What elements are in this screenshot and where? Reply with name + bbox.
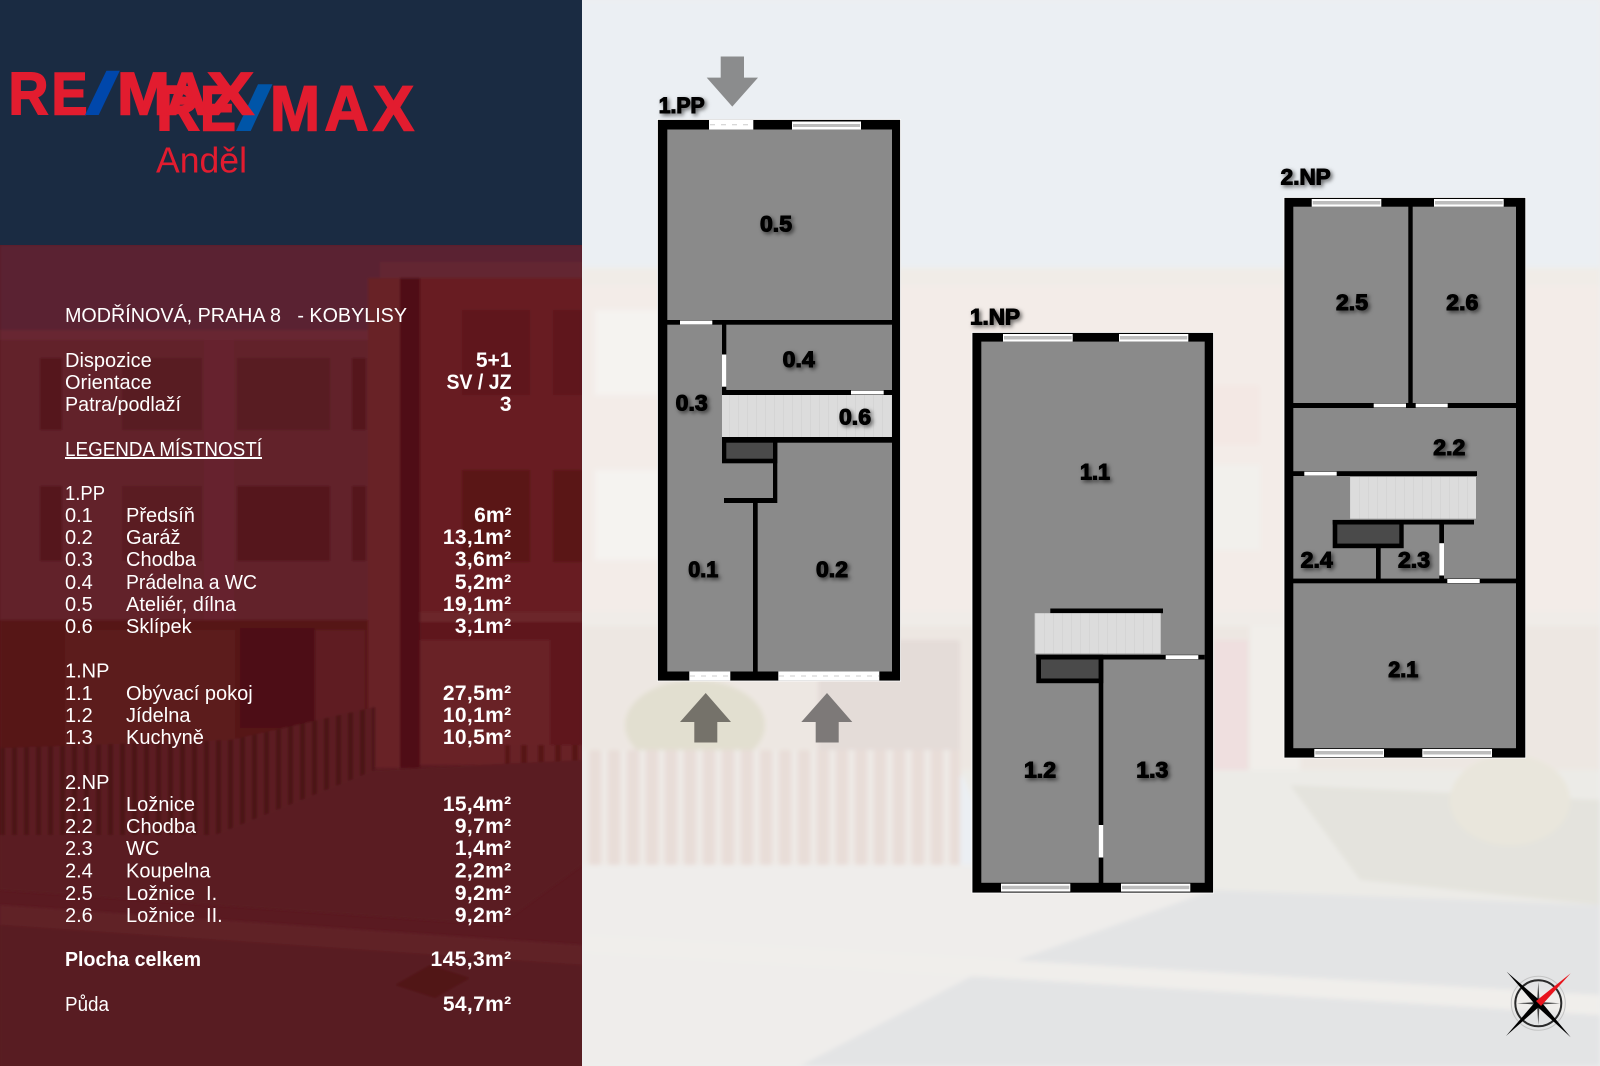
icon: compass bbox=[1506, 972, 1571, 1037]
legend: 2.NP rooms: 2.6 bbox=[65, 905, 93, 927]
logo: RE/MAX overlapping: E bbox=[52, 60, 88, 128]
room labels: 2.NP: 2.4 bbox=[1301, 548, 1333, 572]
legend: 1.PP rooms: 0.1 bbox=[65, 505, 93, 527]
logo: RE/MAX Anděl bbox=[156, 72, 414, 180]
logo: RE/MAX Anděl: A bbox=[324, 72, 368, 144]
logo: RE/MAX overlapping: R bbox=[8, 60, 48, 128]
legend: 1.NP rooms: 1.1 bbox=[65, 683, 93, 705]
heading: room legend: LEGENDA MÍSTNOSTÍ bbox=[65, 438, 262, 461]
arrow: bottom entrance left bbox=[680, 693, 731, 742]
legend: 2.NP rooms: 9,2m² bbox=[455, 904, 512, 927]
legend: 1.PP rooms: 19,1m² bbox=[443, 593, 512, 616]
room labels: 2.NP: 2.3 bbox=[1398, 548, 1430, 572]
legend: 1.PP rooms bbox=[65, 483, 512, 638]
arrow: bottom entrance right bbox=[801, 693, 852, 742]
logo: RE/MAX overlapping: X bbox=[207, 60, 254, 128]
legend: 1.PP rooms: Ateliér, dílna bbox=[126, 594, 237, 616]
legend: 2.NP rooms: 2.3 bbox=[65, 838, 93, 860]
legend: 2.NP rooms: 2.4 bbox=[65, 860, 93, 882]
plan title: 1.PP: 1.PP bbox=[659, 93, 705, 118]
left panel bbox=[0, 0, 582, 1066]
legend: 2.NP rooms: 2.2 bbox=[65, 816, 93, 838]
legend: 2.NP rooms: 1,4m² bbox=[455, 837, 512, 860]
legend: 2.NP rooms: 9,7m² bbox=[455, 815, 512, 838]
legend: 2.NP rooms: 2.5 bbox=[65, 883, 93, 905]
legend: 1.NP rooms: 10,1m² bbox=[443, 704, 512, 727]
legend: 1.NP rooms: 10,5m² bbox=[443, 726, 512, 749]
legend: 1.PP rooms: Prádelna a WC bbox=[126, 572, 257, 594]
legend: 1.PP rooms: 0.6 bbox=[65, 616, 93, 638]
legend: 1.PP rooms: 6m² bbox=[474, 504, 512, 527]
room labels: 1.PP bbox=[676, 212, 871, 582]
legend: 1.PP rooms: 0.2 bbox=[65, 527, 93, 549]
room labels: 1.PP: 0.6 bbox=[839, 404, 871, 430]
room labels: 1.NP: 1.3 bbox=[1136, 758, 1168, 782]
room labels: 2.NP bbox=[1301, 290, 1478, 682]
room labels: 1.PP: 0.2 bbox=[816, 557, 848, 582]
legend: 1.PP rooms: Sklípek bbox=[126, 616, 193, 638]
legend: 1.NP rooms bbox=[65, 660, 512, 749]
text block: property summary bbox=[65, 349, 512, 416]
panel: navy header bbox=[0, 0, 582, 245]
attic area: Půda bbox=[65, 994, 110, 1016]
legend: 1.PP rooms: Chodba bbox=[126, 549, 197, 571]
legend: 1.NP rooms: 1.3 bbox=[65, 727, 93, 749]
total area bbox=[65, 948, 512, 971]
legend: 2.NP rooms: WC bbox=[126, 838, 159, 860]
attic area bbox=[65, 993, 512, 1016]
legend: 1.PP rooms: 3,1m² bbox=[455, 615, 512, 638]
legend: 1.PP rooms: 0.5 bbox=[65, 594, 93, 616]
plan title: 1.NP: 1.NP bbox=[970, 304, 1020, 330]
room labels: 1.NP: 1.1 bbox=[1080, 460, 1110, 484]
floor plan: 2.NP bbox=[1281, 164, 1526, 758]
legend: 2.NP rooms: Chodba bbox=[126, 816, 197, 838]
legend: 2.NP rooms: Ložnice II. bbox=[126, 905, 223, 927]
legend: 1.PP rooms: 13,1m² bbox=[443, 526, 512, 549]
logo: RE/MAX overlapping: M bbox=[117, 60, 170, 128]
room labels: 1.NP: 1.2 bbox=[1024, 758, 1056, 782]
legend: 2.NP rooms: 2.1 bbox=[65, 794, 93, 816]
legend: 2.NP rooms: Koupelna bbox=[126, 860, 211, 882]
legend: 2.NP rooms bbox=[65, 772, 512, 927]
room labels: 1.NP bbox=[1024, 460, 1168, 782]
legend: 2.NP rooms: 2.NP bbox=[65, 772, 109, 794]
total area: 145,3m² bbox=[430, 948, 512, 971]
text block: property summary: 3 bbox=[500, 393, 512, 416]
legend: 1.NP rooms: Obývací pokoj bbox=[126, 683, 253, 705]
legend: 1.PP rooms: 3,6m² bbox=[455, 548, 512, 571]
legend: 1.PP rooms: Garáž bbox=[126, 527, 180, 549]
heading: address: MODŘÍNOVÁ, PRAHA 8 - KOBYLISY bbox=[65, 304, 407, 327]
logo: RE/MAX Anděl: R bbox=[156, 72, 200, 144]
legend: 1.NP rooms: Jídelna bbox=[126, 705, 191, 727]
legend: 1.PP rooms: 0.4 bbox=[65, 572, 93, 594]
text block: property summary: Patra/podlaží bbox=[65, 394, 181, 416]
legend: 1.NP rooms: 27,5m² bbox=[443, 682, 512, 705]
plan title: 2.NP: 2.NP bbox=[1281, 164, 1331, 190]
room labels: 1.PP: 0.1 bbox=[688, 557, 718, 582]
room labels: 1.PP: 0.4 bbox=[783, 347, 815, 372]
floor plan: 1.PP bbox=[658, 93, 900, 681]
legend: 2.NP rooms: 2,2m² bbox=[455, 860, 512, 882]
total area: Plocha celkem bbox=[65, 949, 201, 971]
text block: property summary: Dispozice bbox=[65, 350, 152, 372]
logo: RE/MAX overlapping bbox=[8, 60, 254, 128]
text block: property summary: Orientace bbox=[65, 372, 152, 394]
floor plan: 1.NP bbox=[970, 304, 1214, 893]
legend: 1.NP rooms: 1.NP bbox=[65, 660, 109, 682]
attic area: 54,7m² bbox=[443, 993, 512, 1016]
text block: property summary: SV / JZ bbox=[446, 371, 512, 394]
room labels: 1.PP: 0.3 bbox=[676, 390, 708, 416]
room labels: 2.NP: 2.1 bbox=[1388, 657, 1418, 682]
legend: 1.PP rooms: Předsíň bbox=[126, 505, 195, 527]
room labels: 1.PP: 0.5 bbox=[760, 212, 792, 236]
legend: 2.NP rooms: 9,2m² bbox=[455, 882, 512, 905]
room labels: 2.NP: 2.2 bbox=[1433, 435, 1465, 460]
legend: 1.PP rooms: 5,2m² bbox=[455, 571, 512, 594]
legend: 2.NP rooms: 15,4m² bbox=[443, 793, 512, 816]
legend: 1.NP rooms: Kuchyně bbox=[126, 727, 204, 749]
logo: RE/MAX Anděl: M bbox=[270, 72, 320, 144]
arrow: top entrance bbox=[707, 56, 758, 107]
logo: RE/MAX Anděl: Anděl bbox=[156, 140, 247, 180]
legend: 2.NP rooms: Ložnice I. bbox=[126, 883, 217, 905]
legend: 1.PP rooms: 0.3 bbox=[65, 549, 93, 571]
logo: RE/MAX overlapping: A bbox=[166, 60, 208, 128]
legend: 1.PP rooms: 1.PP bbox=[65, 483, 105, 505]
room labels: 2.NP: 2.6 bbox=[1446, 290, 1478, 315]
text block: property summary: 5+1 bbox=[476, 349, 512, 372]
legend: 1.NP rooms: 1.2 bbox=[65, 705, 93, 727]
legend: 2.NP rooms: Ložnice bbox=[126, 794, 195, 816]
panel: red legend background with tinted photo bbox=[0, 245, 582, 1066]
logo: RE/MAX Anděl: X bbox=[373, 72, 414, 144]
room labels: 2.NP: 2.5 bbox=[1336, 290, 1368, 315]
logo: RE/MAX Anděl: E bbox=[200, 72, 236, 144]
